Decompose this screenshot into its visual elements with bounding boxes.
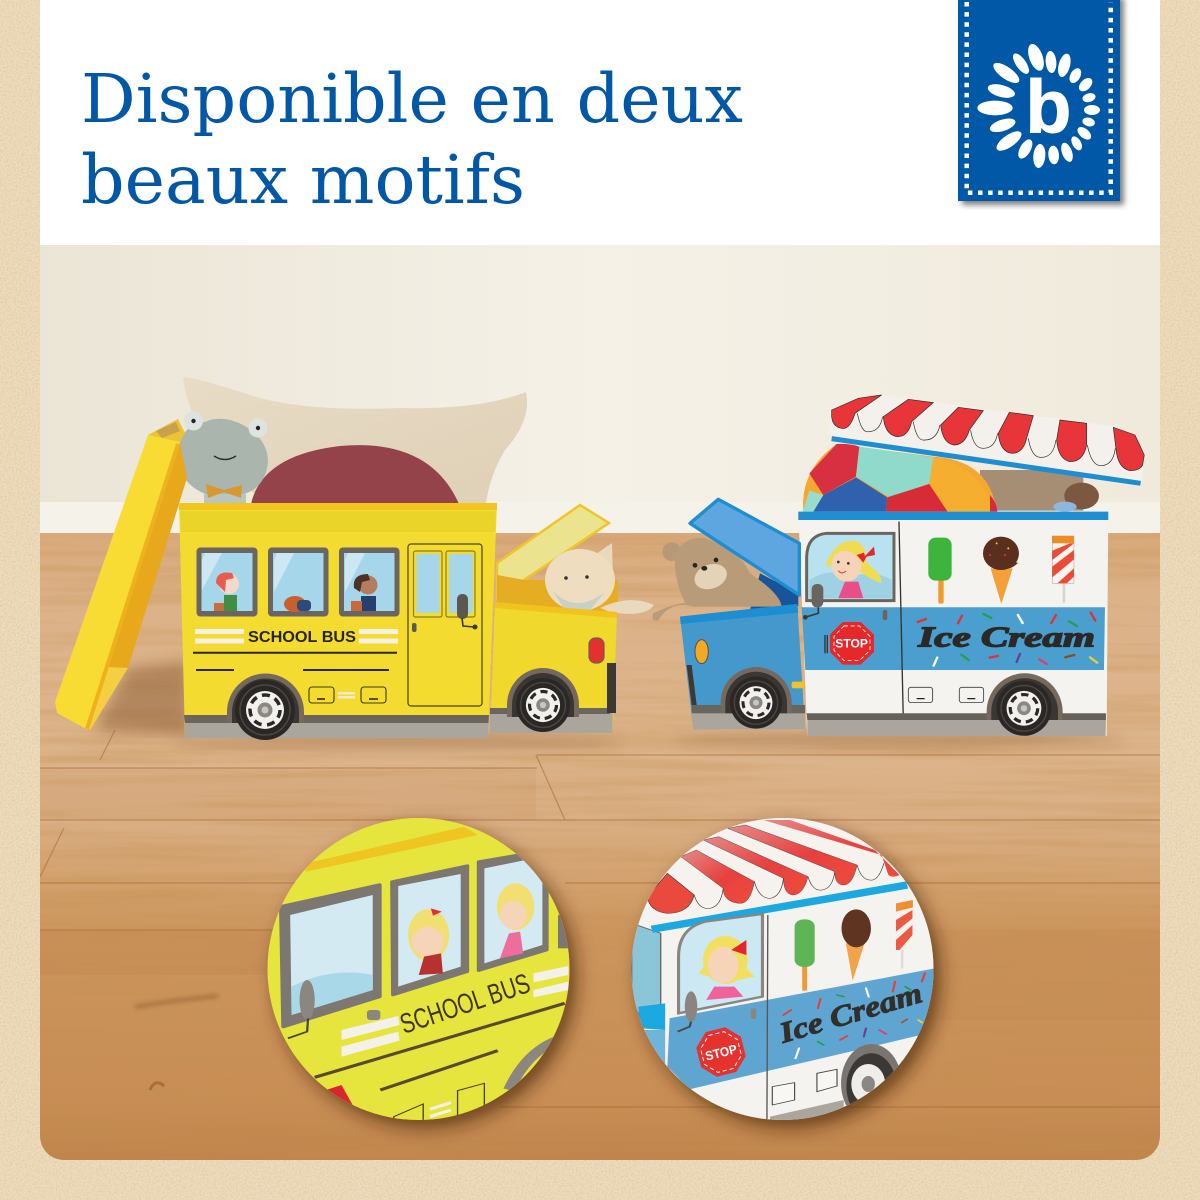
awning roof lid	[830, 395, 1144, 486]
popsicle green	[928, 538, 952, 604]
awning	[647, 820, 902, 923]
striped popsicle	[1052, 536, 1074, 603]
frog plush	[178, 412, 268, 504]
title: beaux motifs	[81, 141, 525, 219]
school bus label: SCHOOL BUS	[248, 629, 356, 646]
yellow rim	[306, 827, 478, 872]
school bus storage box	[55, 377, 654, 740]
baseboard	[40, 502, 1160, 534]
girl driver	[827, 541, 882, 598]
bus windows	[196, 548, 400, 616]
detail circle: ice cream truck	[625, 810, 945, 1133]
bus cab body	[490, 602, 617, 733]
wall	[40, 245, 1160, 505]
truck blue band	[802, 607, 1105, 670]
title	[81, 60, 743, 219]
patchwork ball	[803, 444, 997, 513]
bus cab lid	[497, 505, 609, 598]
school bus lettering: SCHOOL BUS	[396, 967, 534, 1040]
brand logo tag	[958, 0, 1120, 201]
tan cushion inside	[980, 470, 1083, 511]
sprinkles	[783, 973, 925, 1058]
ice cream lettering: Ice Cream	[917, 623, 1095, 654]
stop sign: STOP	[835, 637, 868, 650]
window one	[281, 885, 379, 1027]
ice cream truck storage box	[652, 395, 1144, 736]
bus underbody	[184, 715, 489, 723]
cab amber lamp	[695, 640, 708, 664]
blue band	[667, 968, 935, 1089]
brand logo tag: b	[1026, 64, 1071, 148]
cargo body	[179, 503, 497, 738]
side glimpse	[632, 923, 661, 1018]
door line	[765, 915, 769, 1120]
truck cab body	[680, 604, 805, 729]
ice cream lettering: Ice Cream	[775, 977, 926, 1050]
red round cushion	[251, 445, 459, 504]
stop sign	[825, 622, 874, 665]
cab window	[679, 914, 762, 1013]
passengers	[214, 572, 378, 612]
chocolate ice cream cone	[983, 537, 1019, 604]
door seam	[899, 522, 903, 720]
truck mirror	[803, 584, 887, 620]
teddy bear plush	[652, 538, 782, 621]
truck cab wheel	[721, 667, 792, 729]
side stripes	[195, 629, 398, 644]
bus cab wheel	[507, 668, 579, 732]
mirror	[300, 980, 315, 1020]
cab interior	[497, 575, 618, 614]
mirror	[685, 991, 697, 1022]
cone	[846, 942, 865, 981]
wheel arch	[509, 1040, 558, 1090]
window three	[479, 850, 547, 971]
floor shadows below the boxes	[95, 660, 1125, 747]
detail circle: school bus	[260, 810, 580, 1130]
bus rear wheel	[227, 674, 304, 740]
truck underbody	[807, 713, 1106, 720]
stop sign	[693, 1024, 749, 1080]
green popsicle	[802, 963, 807, 991]
window two	[392, 866, 467, 995]
sprinkles	[918, 613, 1097, 666]
cab interior	[750, 573, 798, 610]
hatches	[772, 1069, 837, 1105]
white stripes	[342, 966, 568, 1057]
truck hatches	[908, 687, 984, 703]
open roof lid, leaning	[55, 419, 187, 730]
title: Disponible en deux	[81, 60, 743, 138]
stop sign: STOP	[704, 1041, 739, 1064]
header panel	[40, 0, 1160, 245]
truck wheel	[841, 1044, 902, 1123]
striped popsicle	[901, 948, 904, 968]
beige pillow	[183, 377, 527, 503]
bus mirror	[412, 594, 478, 632]
hatches	[394, 1083, 484, 1123]
side lines	[315, 1003, 565, 1090]
bus door	[408, 544, 482, 706]
room photo	[40, 245, 1160, 1163]
truck cab window	[807, 533, 894, 601]
truck cargo body	[798, 512, 1108, 736]
fox plush	[545, 543, 654, 614]
luggage hatches	[309, 687, 386, 703]
wooden floor	[40, 533, 1160, 1163]
truck cab lid	[690, 499, 799, 595]
cab tail light	[589, 638, 604, 663]
truck rear wheel	[987, 673, 1063, 736]
